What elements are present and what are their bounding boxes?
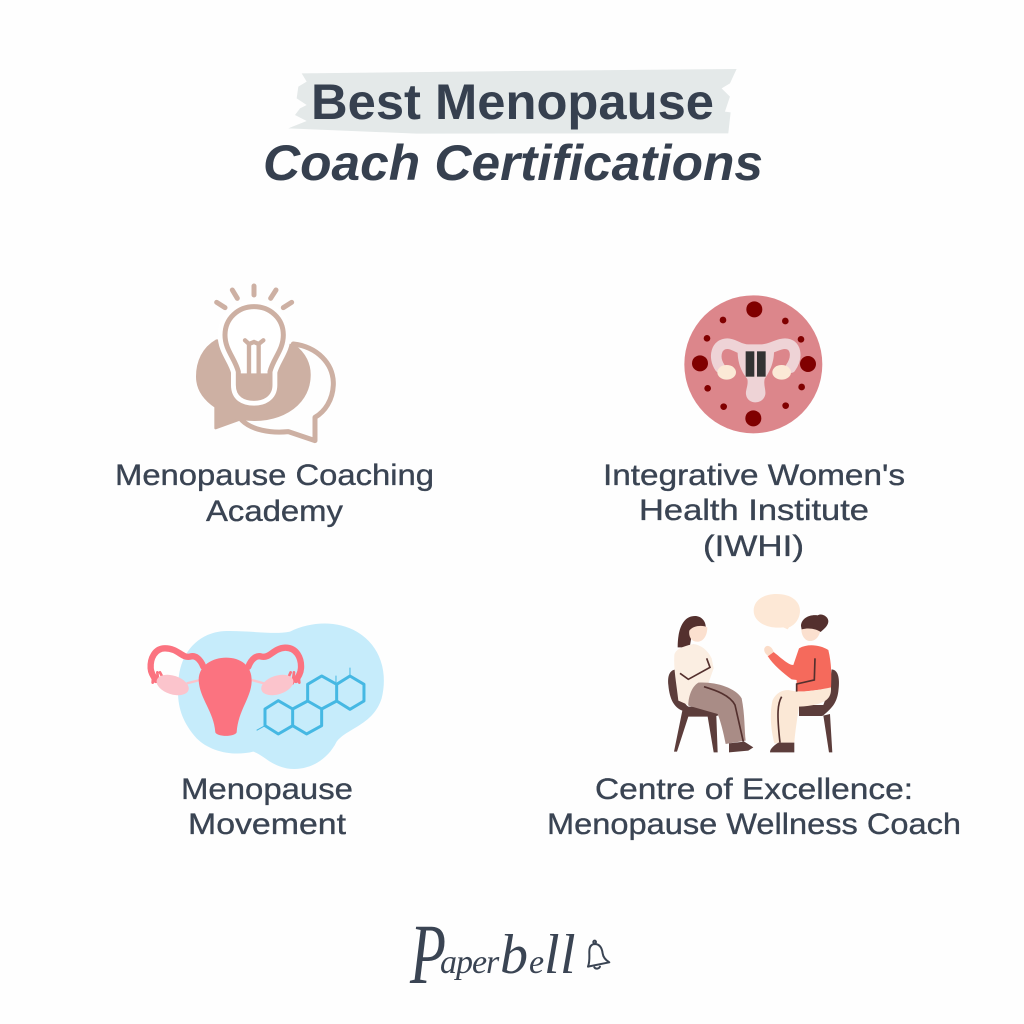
logo: Paperbell with bell icon: r bbox=[486, 944, 500, 981]
label: Integrative Women's Health Institute (IWHI): Health Institute bbox=[639, 494, 869, 527]
label: Centre of Excellence: Menopause Wellness Coach: Menopause Wellness Coach bbox=[547, 808, 961, 841]
label: Centre of Excellence: Menopause Wellness Coach bbox=[547, 773, 961, 841]
label: Centre of Excellence: Menopause Wellness Coach: Centre of Excellence: bbox=[595, 773, 913, 806]
label: Integrative Women's Health Institute (IWHI): (IWHI) bbox=[703, 530, 804, 563]
label: Menopause Movement: Menopause bbox=[181, 773, 353, 806]
label: Menopause Coaching Academy: Academy bbox=[206, 495, 343, 528]
logo: Paperbell with bell icon: p bbox=[454, 944, 473, 981]
label: Menopause Coaching Academy: Menopause Coaching bbox=[115, 459, 434, 492]
title with brush highlight bbox=[263, 69, 763, 191]
label: Menopause Movement bbox=[181, 773, 353, 841]
icon: uterus and hormone molecule on blue blob bbox=[151, 624, 384, 769]
logo: Paperbell with bell icon: P bbox=[409, 906, 446, 1002]
title with brush highlight: Coach Certifications bbox=[263, 135, 763, 191]
speech bubble bbox=[754, 594, 800, 629]
right woman bbox=[764, 614, 839, 752]
label: Integrative Women's Health Institute (IWHI) bbox=[603, 459, 905, 563]
logo: Paperbell with bell icon: l bbox=[560, 924, 576, 986]
left woman bbox=[668, 616, 753, 752]
logo: Paperbell with bell icon bbox=[409, 906, 609, 1002]
logo: Paperbell with bell icon: a bbox=[440, 944, 457, 981]
label: Menopause Movement: Movement bbox=[188, 808, 347, 841]
logo: Paperbell with bell icon: e bbox=[472, 944, 487, 981]
logo: Paperbell with bell icon: b bbox=[500, 924, 528, 986]
logo: Paperbell with bell icon: e bbox=[529, 944, 544, 981]
icon: two women talking in chairs bbox=[668, 594, 839, 752]
title with brush highlight: Best Menopause bbox=[311, 74, 714, 130]
label: Integrative Women's Health Institute (IWHI): Integrative Women's bbox=[603, 459, 905, 492]
logo: Paperbell with bell icon: l bbox=[544, 924, 560, 986]
label: Menopause Coaching Academy bbox=[115, 459, 434, 528]
icon: lightbulb in speech bubbles bbox=[197, 286, 333, 441]
icon: bell bbox=[588, 941, 609, 969]
icon: uterus in red circle bbox=[684, 295, 822, 433]
